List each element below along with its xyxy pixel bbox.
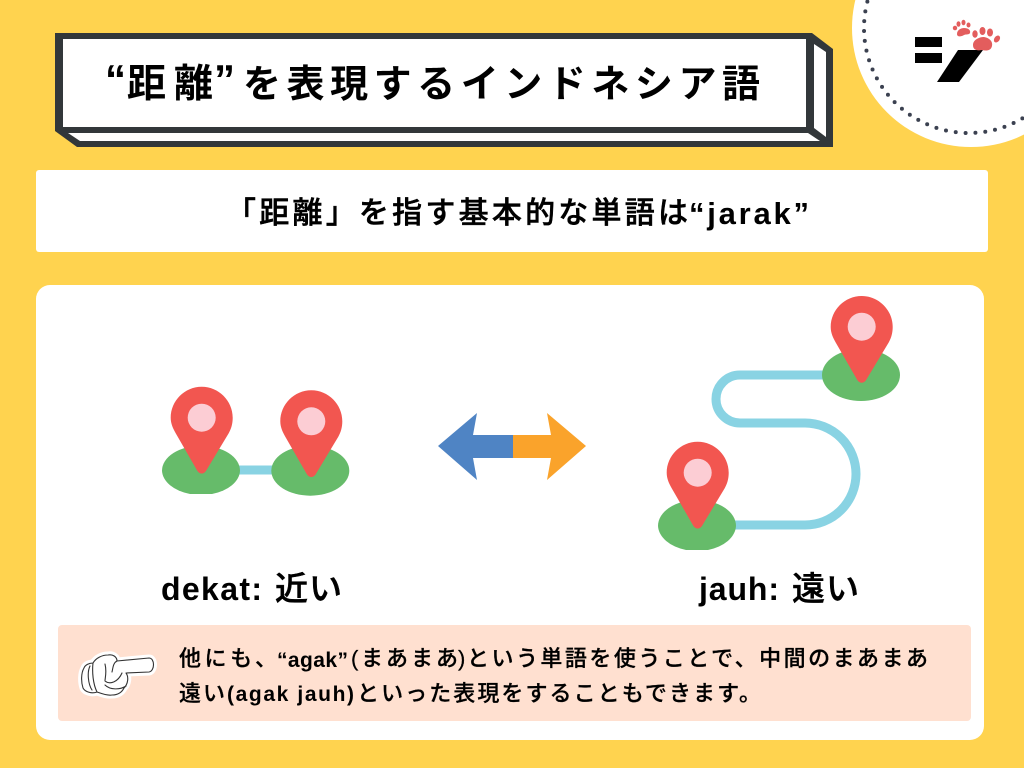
note text: (: [351, 646, 359, 671]
icon: pointing hand: [82, 655, 154, 695]
subtitle: “jarak”: [689, 196, 809, 231]
label: jauh: 遠い: [792, 570, 859, 607]
title frame: [55, 33, 833, 147]
double arrow: [438, 413, 586, 480]
title: “: [105, 56, 126, 103]
main panel: [36, 285, 984, 740]
label: jauh: [698, 570, 859, 607]
note text: といった表現をすることもできます。: [357, 681, 761, 706]
title: ”: [214, 56, 235, 103]
subtitle: 「距離」を指す基本的な単語は: [226, 197, 688, 230]
title: を表現するインドネシア語: [243, 64, 760, 106]
logo badge: [852, 0, 1024, 147]
title: [105, 56, 760, 106]
note text: という単語を使うことで、中間のまあまあ: [467, 646, 928, 671]
note text: 遠い: [179, 681, 225, 706]
subtitle panel: [36, 170, 988, 252]
note text: まあまあ: [361, 646, 458, 671]
icon: far map pins with route: [658, 296, 900, 550]
label: dekat: dekat:: [161, 571, 262, 607]
note text: “agak”: [277, 649, 348, 672]
note panel: [58, 625, 971, 721]
title: 距離: [127, 63, 213, 106]
label: jauh: jauh:: [698, 571, 779, 607]
note text: 他にも、: [179, 646, 277, 671]
note text: [179, 646, 928, 706]
label: dekat: 近い: [275, 570, 342, 607]
note text: (agak jauh): [227, 683, 354, 706]
note text: ): [458, 646, 465, 671]
icon: near map pins: [162, 387, 349, 496]
label: dekat: [161, 570, 342, 607]
